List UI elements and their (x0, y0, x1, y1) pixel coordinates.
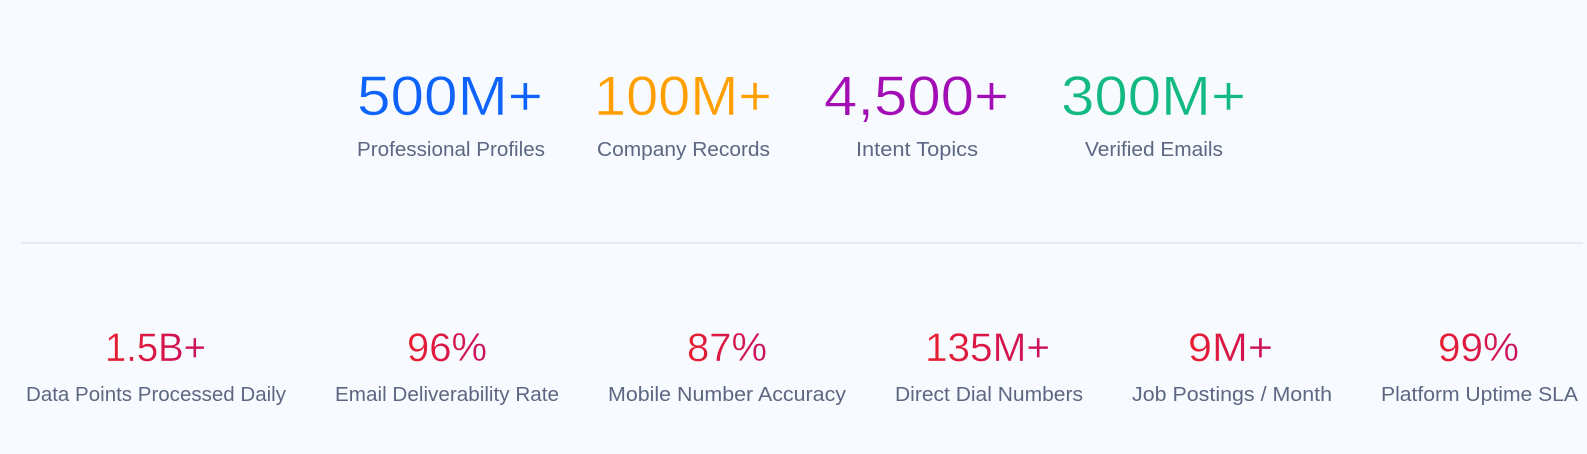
stat: 100M+ Company Records: Company Records (597, 139, 770, 161)
stat: 135M+ Direct Dial Numbers (895, 326, 1083, 406)
stat: 87% Mobile Number Accuracy: Mobile Number Accuracy (608, 384, 846, 406)
stat: 99% Platform Uptime SLA (1381, 326, 1579, 406)
stat: 100M+ Company Records: 100M+ (594, 64, 772, 127)
stat: 100M+ Company Records (594, 64, 772, 161)
stat: 96% Email Deliverability Rate (335, 326, 559, 406)
stat: 99% Platform Uptime SLA: Platform Uptime SLA (1381, 384, 1579, 406)
stat: 500M+ Professional Profiles (357, 64, 545, 161)
stat: 1.5B+ Data Points Processed Daily: Data Points Processed Daily (26, 384, 286, 406)
stat: 4,500+ Intent Topics (824, 64, 1009, 161)
stat: 96% Email Deliverability Rate: Email Deliverability Rate (335, 384, 559, 406)
stat: 300M+ Verified Emails: Verified Emails (1085, 139, 1223, 161)
stat: 4,500+ Intent Topics: Intent Topics (856, 139, 978, 161)
stat: 300M+ Verified Emails: 300M+ (1061, 64, 1246, 127)
stat: 9M+ Job Postings / Month: 9M+ (1188, 326, 1273, 370)
stat: 1.5B+ Data Points Processed Daily: 1.5B+ (105, 326, 206, 370)
stat: 87% Mobile Number Accuracy: 87% (687, 326, 767, 370)
stat: 87% Mobile Number Accuracy (608, 326, 846, 406)
stat: 1.5B+ Data Points Processed Daily (26, 326, 286, 406)
stat: 9M+ Job Postings / Month (1132, 326, 1332, 406)
stat: 500M+ Professional Profiles: 500M+ (357, 64, 543, 127)
stat: 9M+ Job Postings / Month: Job Postings / Month (1132, 384, 1332, 406)
stat: 300M+ Verified Emails (1061, 64, 1246, 161)
stat: 96% Email Deliverability Rate: 96% (407, 326, 487, 370)
stat: 4,500+ Intent Topics: 4,500+ (824, 64, 1009, 127)
stat: 135M+ Direct Dial Numbers: 135M+ (925, 326, 1050, 370)
stat: 99% Platform Uptime SLA: 99% (1438, 326, 1519, 370)
stat: 500M+ Professional Profiles: Professional Profiles (357, 139, 545, 161)
stat: 135M+ Direct Dial Numbers: Direct Dial Numbers (895, 384, 1083, 406)
